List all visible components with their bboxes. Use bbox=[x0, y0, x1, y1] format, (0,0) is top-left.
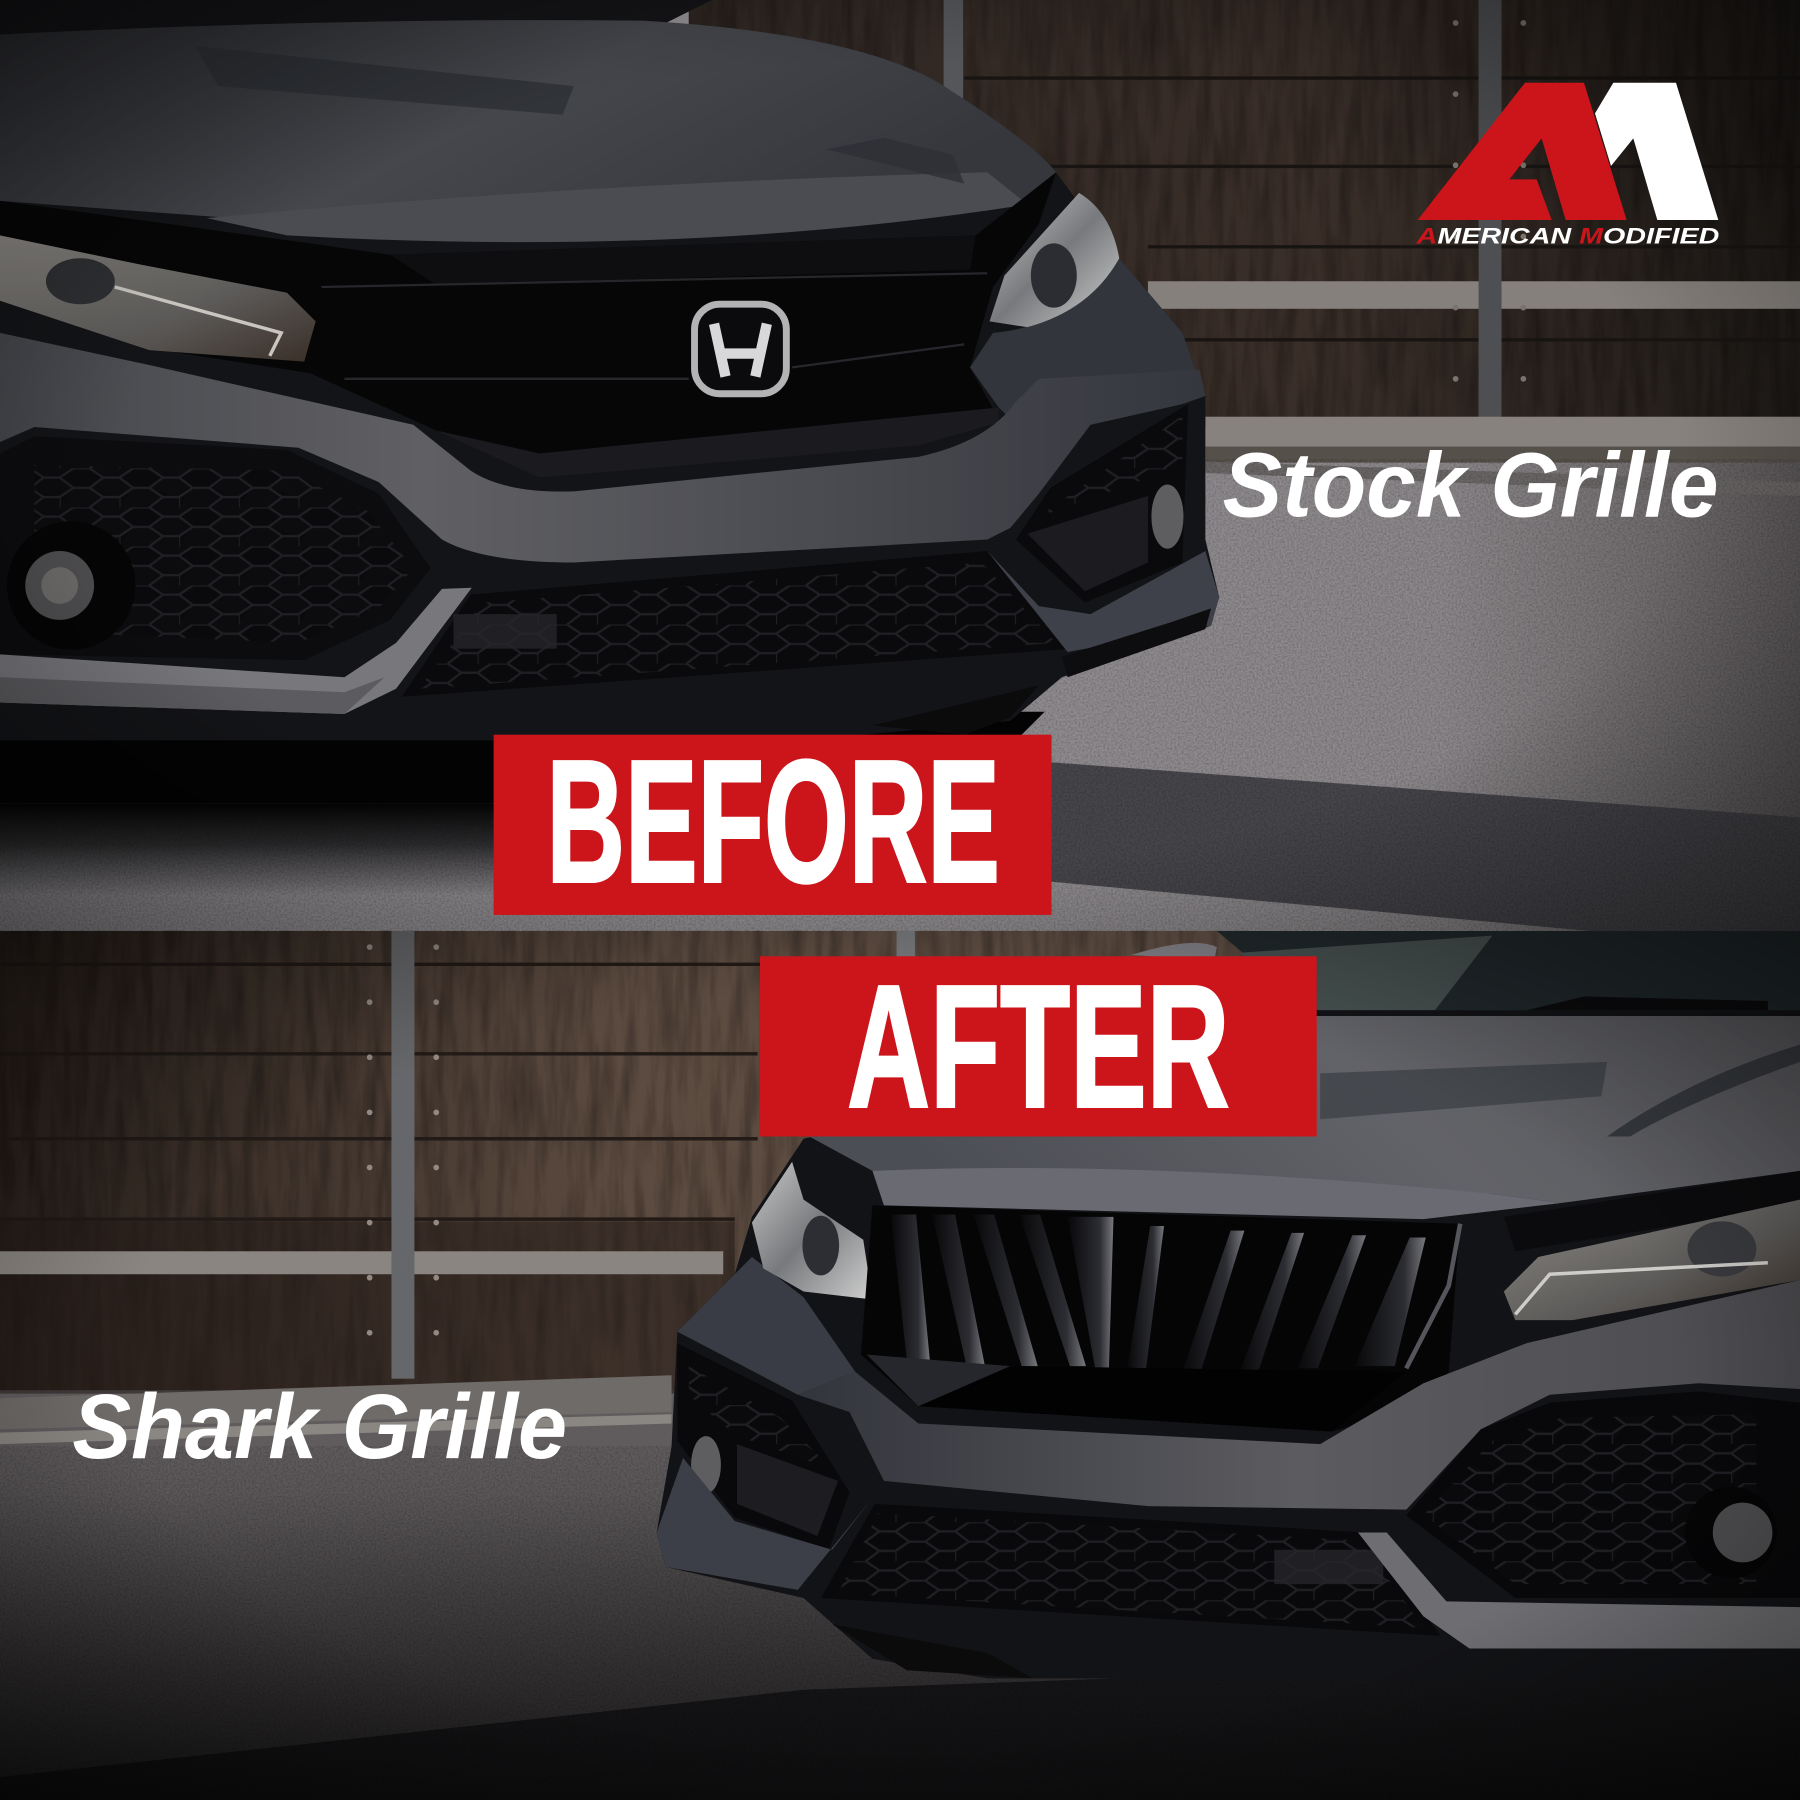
label: Stock Grille: Stock Grille bbox=[1223, 435, 1718, 537]
honda emblem bbox=[695, 304, 786, 394]
bumper bbox=[798, 1280, 1800, 1510]
wheel bbox=[832, 1624, 1033, 1678]
logo mark bbox=[1418, 83, 1718, 220]
car: stock grille front end bbox=[0, 0, 1219, 740]
logo: American Modified bbox=[1415, 83, 1719, 248]
front lip left bbox=[657, 1458, 872, 1590]
wheel bbox=[872, 685, 1039, 735]
hood bbox=[0, 20, 1056, 237]
right headlamp bbox=[1504, 1200, 1800, 1320]
left headlamp bbox=[0, 235, 316, 362]
right fog housing bbox=[1406, 1391, 1800, 1598]
wooden fence bbox=[0, 931, 1263, 1444]
lower grille bbox=[402, 551, 1073, 697]
shark grille bbox=[861, 1205, 1460, 1432]
lower grille bbox=[821, 1504, 1441, 1636]
windshield and mirror bbox=[1131, 931, 1800, 1016]
right headlamp bbox=[990, 193, 1119, 327]
bumper bbox=[0, 333, 1205, 562]
black grille bbox=[0, 172, 1056, 476]
gravel texture bbox=[0, 459, 1800, 931]
front lip right bbox=[987, 551, 1219, 652]
right fog housing bbox=[1016, 404, 1188, 603]
asphalt shadow bbox=[1050, 762, 1800, 931]
car: shark grille front end bbox=[657, 1010, 1800, 1678]
banner: BEFORE: BEFORE bbox=[546, 724, 1000, 919]
left fog housing bbox=[0, 436, 430, 660]
grille fins bbox=[891, 1215, 1426, 1372]
label: Shark Grille: Shark Grille bbox=[72, 1376, 567, 1478]
gravel texture bbox=[0, 1446, 1800, 1800]
panel: before, stock grille photo bbox=[0, 0, 1800, 931]
left fender bbox=[677, 1257, 855, 1395]
wooden fence bbox=[689, 0, 1800, 496]
left headlamp bbox=[752, 1162, 872, 1299]
fender right bbox=[970, 258, 1203, 419]
asphalt shadow bbox=[0, 1653, 1800, 1800]
shadow under car bbox=[0, 712, 1050, 804]
panel: after, shark grille photo bbox=[0, 931, 1800, 1800]
hood bbox=[809, 1016, 1800, 1203]
left fog housing bbox=[677, 1343, 849, 1550]
banner: BEFORE bbox=[494, 724, 1052, 919]
silver stripe bbox=[0, 588, 472, 714]
silver stripe bbox=[1358, 1533, 1800, 1648]
logo wordmark: AMERICAN MODIFIED bbox=[1415, 223, 1719, 248]
banner: AFTER: AFTER bbox=[847, 949, 1229, 1144]
